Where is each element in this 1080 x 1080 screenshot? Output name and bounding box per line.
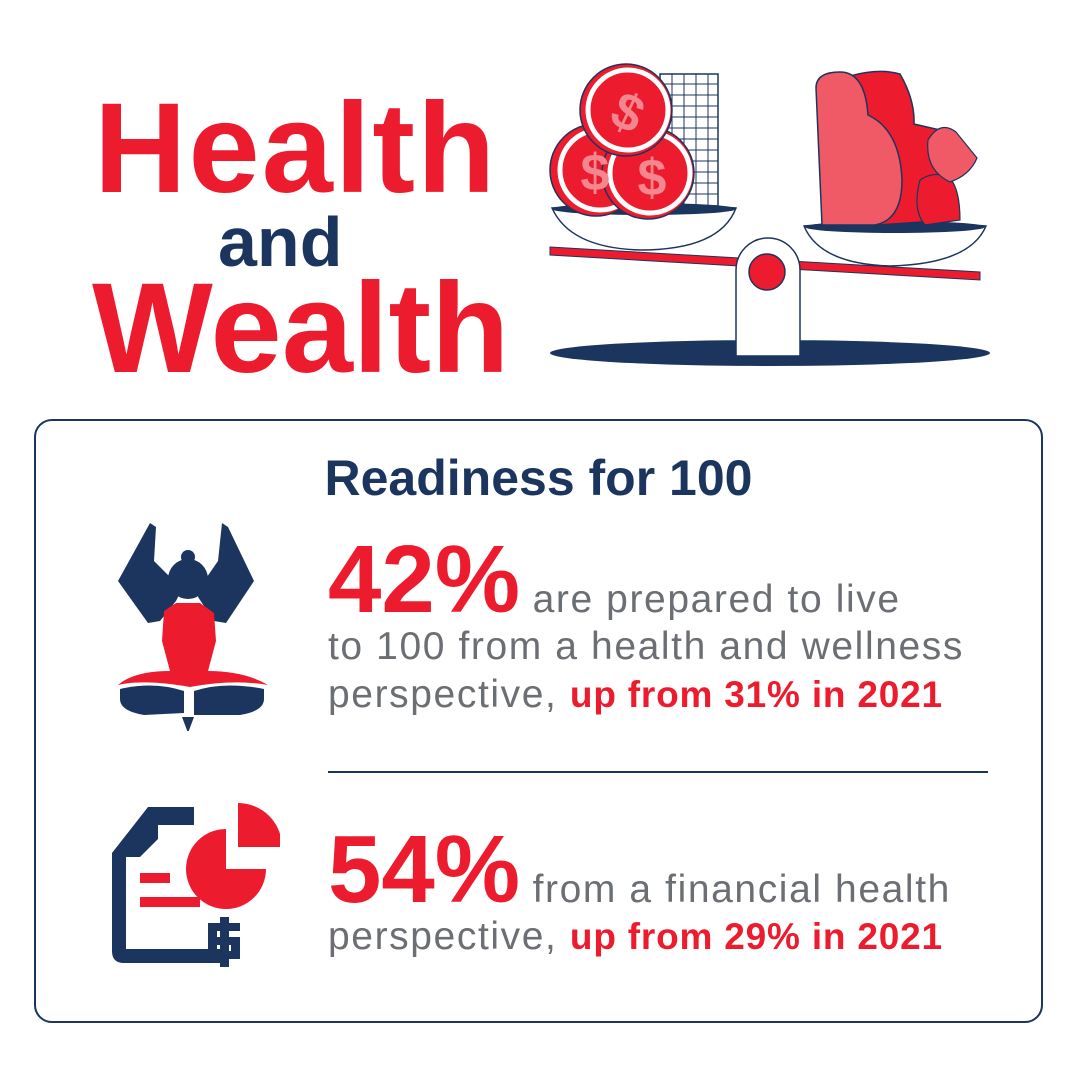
stat: 42% bbox=[328, 526, 964, 716]
illustration: balance scale with coins and hearts: $ bbox=[581, 144, 610, 202]
stat: 54%: 54% from a financial health bbox=[328, 816, 951, 923]
illustration: balance scale with coins and hearts: $ bbox=[638, 149, 667, 207]
title: and bbox=[218, 203, 342, 281]
stat: 54%: perspective, up from 29% in 2021 bbox=[328, 915, 943, 958]
illustration: balance scale with coins and hearts bbox=[549, 63, 990, 366]
icon: yoga person bbox=[118, 523, 268, 731]
panel: readiness bbox=[34, 419, 1043, 1023]
heading: Readiness for 100 bbox=[324, 450, 752, 506]
stat: 42%: 42% are prepared to live bbox=[328, 526, 901, 633]
stat: 42%: perspective, up from 31% in 2021 bbox=[328, 673, 943, 716]
title bbox=[92, 77, 509, 400]
title: Health bbox=[94, 77, 497, 220]
stat: 42%: to 100 from a health and wellness bbox=[328, 625, 964, 668]
title: Wealth bbox=[92, 257, 509, 400]
illustration: balance scale with coins and hearts: $ bbox=[602, 81, 653, 145]
icon: financial document bbox=[112, 803, 280, 967]
